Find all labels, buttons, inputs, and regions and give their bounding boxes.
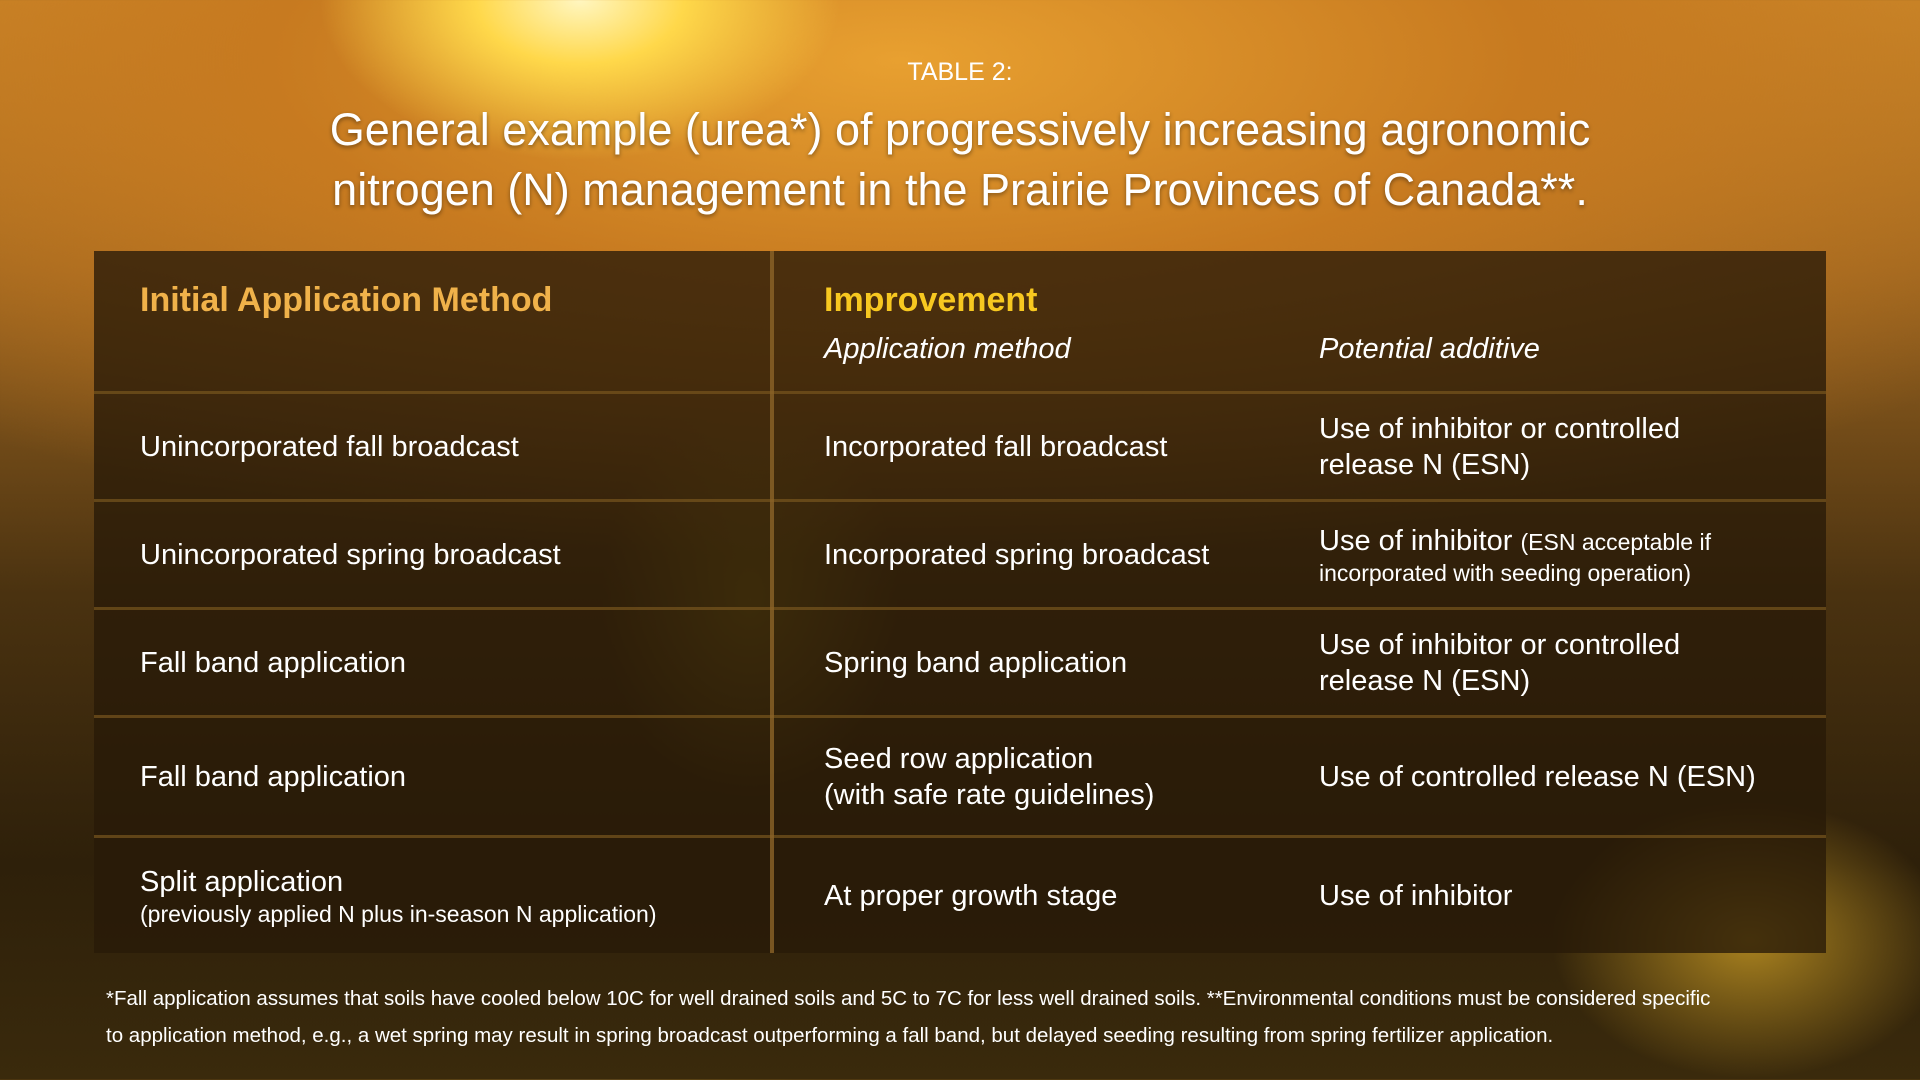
- row 4: Seed row application: [824, 742, 1093, 774]
- row 1: release N (ESN): [1319, 448, 1530, 480]
- subheader: application method: Application method: [824, 333, 1071, 365]
- row 5: At proper growth stage: [824, 880, 1117, 912]
- row 1: Incorporated fall broadcast: [824, 430, 1167, 462]
- row 5: Split application: [140, 866, 343, 898]
- title: General example (urea*) of progressively increasing agronomic: [330, 104, 1590, 155]
- row 5: Use of inhibitor: [1319, 880, 1512, 912]
- row 1: Use of inhibitor or controlled: [1319, 412, 1680, 444]
- row 3: Fall band application: [140, 646, 406, 678]
- row 1: Unincorporated fall broadcast: [140, 430, 519, 462]
- table label: TABLE 2:: [907, 58, 1013, 86]
- header row: [94, 251, 1826, 394]
- row 3: release N (ESN): [1319, 664, 1530, 696]
- row 4: Fall band application: [140, 760, 406, 792]
- row 3: [94, 610, 1826, 718]
- row 2: [94, 502, 1826, 610]
- row 3: Use of inhibitor or controlled: [1319, 628, 1680, 660]
- subheader: potential additive: Potential additive: [1319, 333, 1540, 365]
- row 4: (with safe rate guidelines): [824, 778, 1154, 810]
- header: improvement: Improvement: [824, 281, 1038, 319]
- row 4: [94, 718, 1826, 838]
- footnote: *Fall application assumes that soils have cooled below 10C for well drained soils and 5C to 7C for less well drained soils. **Environmental conditions must be considered specific to application method, e.g., a wet spring may result in spring broadcast outperforming a fall band, but delayed seeding resulting from spring fertilizer application.: [106, 987, 1710, 1047]
- title: [330, 104, 1590, 219]
- row 2: incorporated with seeding operation): [1319, 560, 1691, 586]
- row 1: [94, 394, 1826, 502]
- row 5: (previously applied N plus in-season N application): [140, 900, 656, 926]
- header: initial method: Initial Application Method: [140, 281, 552, 319]
- row 3: Spring band application: [824, 646, 1127, 678]
- title: nitrogen (N) management in the Prairie Provinces of Canada**.: [332, 164, 1588, 215]
- row 2: Incorporated spring broadcast: [824, 538, 1209, 570]
- row 5: [94, 838, 1826, 953]
- row 2: Unincorporated spring broadcast: [140, 538, 561, 570]
- row 2: Use of inhibitor (ESN acceptable if: [1319, 524, 1711, 556]
- table: [94, 251, 1826, 953]
- row 4: Use of controlled release N (ESN): [1319, 760, 1756, 792]
